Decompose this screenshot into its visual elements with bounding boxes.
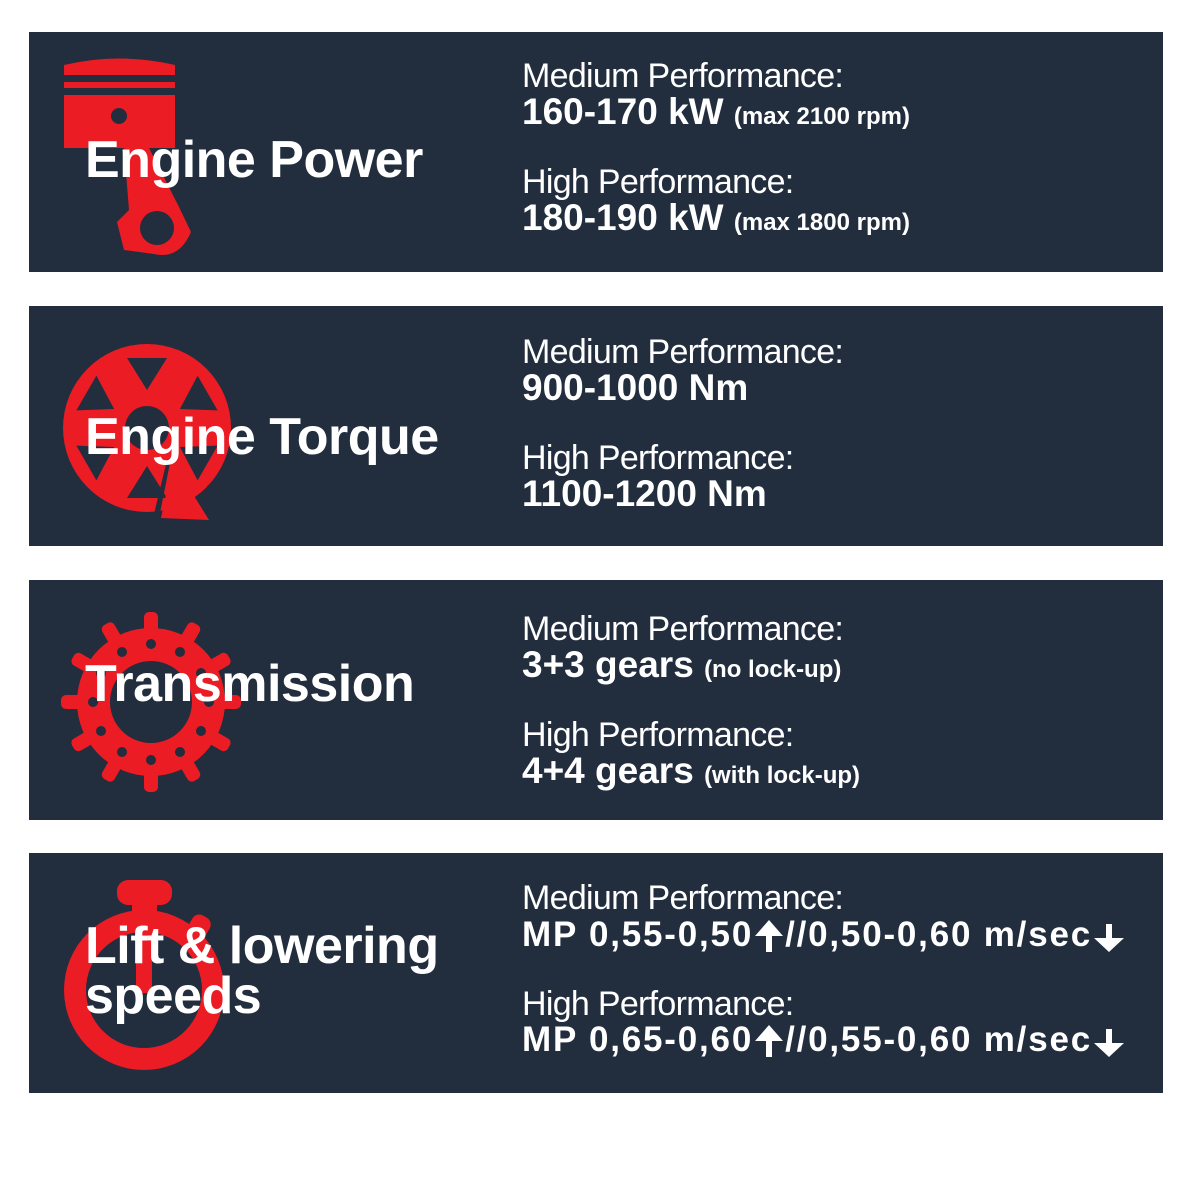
specs: transmission: Medium Performance:: [522, 610, 843, 648]
specs: engine torque: [522, 333, 843, 514]
specs: transmission: High Performance:: [522, 716, 794, 754]
panel: lift & lowering speeds: [29, 853, 1163, 1093]
specs: lift & lowering: [522, 879, 1124, 1059]
specs: transmission: [522, 610, 860, 791]
title: Engine Power: Engine Power: [85, 131, 423, 189]
panel: engine torque: [29, 306, 1163, 546]
specs: engine torque: 1100-1200 Nm: [522, 473, 767, 514]
specs: lift & lowering: MP 0,55-0,50 //0,50-0,60 m/sec: [522, 915, 1092, 954]
specs: lift & lowering: High Performance:: [522, 985, 794, 1023]
specs: engine power: High Performance:: [522, 163, 794, 201]
specs: transmission: 4+4 gears (with lock-up): [522, 750, 860, 791]
specs: engine power: [522, 57, 910, 238]
specs: engine torque: High Performance:: [522, 439, 794, 477]
specs: engine power: 180-190 kW (max 1800 rpm): [522, 197, 910, 238]
title: Lift & lowering speeds: Lift & lowering: [85, 917, 439, 975]
panel: transmission: [29, 580, 1163, 820]
specs: engine torque: Medium Performance:: [522, 333, 843, 371]
title: Lift & lowering speeds: [85, 917, 439, 1025]
title: Lift & lowering speeds: speeds: [85, 967, 261, 1025]
icon: piston: [64, 58, 191, 255]
panel: engine power: [29, 32, 1163, 272]
specs: engine power: Medium Performance:: [522, 57, 843, 95]
title: Transmission: Transmission: [85, 655, 414, 713]
specs: engine torque: 900-1000 Nm: [522, 367, 748, 408]
icon: stopwatch: [64, 880, 223, 1070]
specs: engine power: 160-170 kW (max 2100 rpm): [522, 91, 910, 132]
icon: gear: [61, 612, 241, 792]
title: Engine Torque: Engine Torque: [85, 408, 439, 466]
specs: transmission: 3+3 gears (no lock-up): [522, 644, 841, 685]
icon: wheel with arrow: [63, 344, 231, 520]
specs: lift & lowering: Medium Performance:: [522, 879, 843, 917]
specs: lift & lowering: MP 0,65-0,60 //0,55-0,60 m/sec: [522, 1020, 1092, 1059]
